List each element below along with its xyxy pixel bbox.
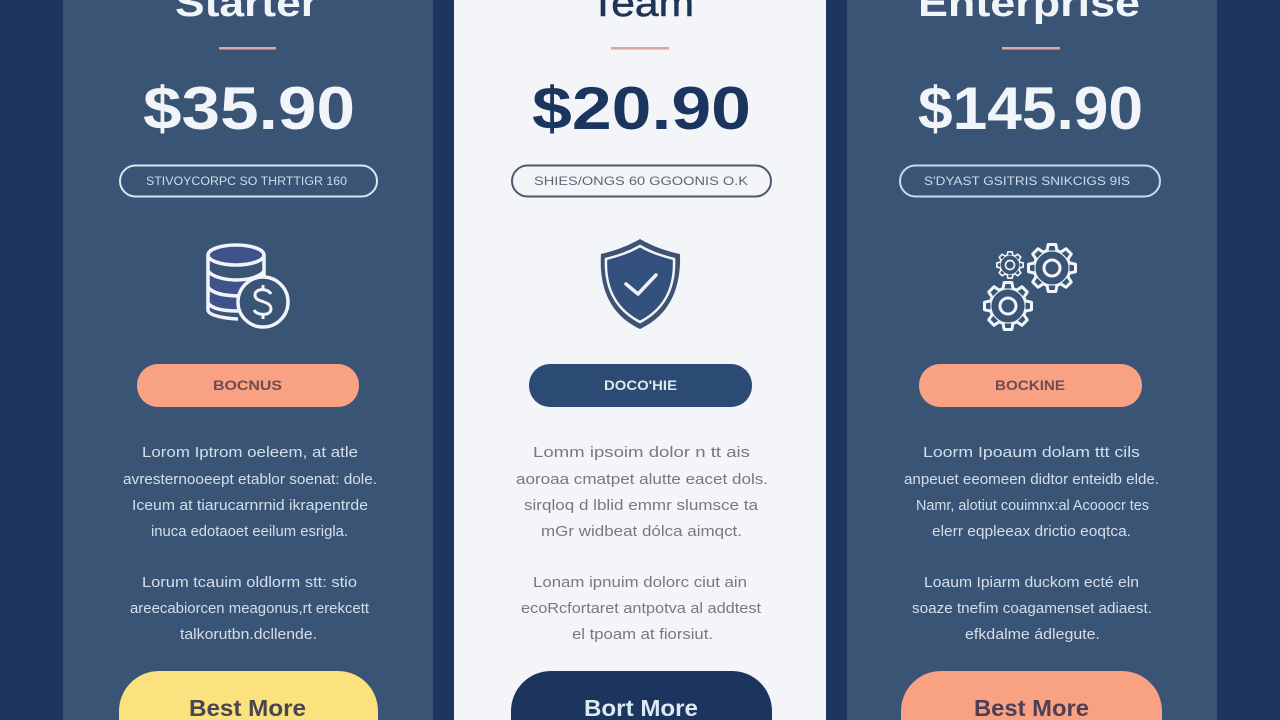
outlined label: Team [512, 166, 771, 196]
badge button: Starter [137, 364, 359, 407]
panel: Starter plan [63, 0, 433, 720]
text block: Starter description 2: areecabiorcen meagonus,rt erekcett [130, 600, 370, 617]
text block: Team description 2: Lonam ipnuim dolorc ciut ain [533, 574, 747, 591]
text block: Team description 1: sirqloq d lblid emmr slumsce ta [524, 497, 759, 514]
accent divider: Team [611, 47, 669, 50]
outlined label: Enterprise: S'DYAST GSITRIS SNIKCIGS 9IS [924, 174, 1130, 188]
badge button: Team [529, 364, 752, 407]
text block: Starter description 2: talkorutbn.dcllende. [180, 626, 317, 643]
panel: Team plan [454, 0, 826, 720]
price: Enterprise: $145.90 [918, 75, 1143, 142]
text block: Starter description 2 [130, 574, 370, 643]
panel: Enterprise plan [847, 0, 1217, 720]
text block: Enterprise description 1: elerr eqpleeax drictio eoqtca. [932, 523, 1131, 540]
text block: Enterprise description 2: Loaum Ipiarm duckom ecté eln [924, 574, 1139, 591]
icon: gears [984, 244, 1076, 330]
accent divider: Starter [219, 47, 276, 50]
text block: Starter description 2: Lorum tcauim oldlorm stt: stio [142, 574, 357, 591]
price: Starter: $35.90 [143, 75, 355, 142]
text block: Enterprise description 2: efkdalme ádlegute. [965, 626, 1100, 643]
badge button: Team: DOCO'HIE [604, 377, 677, 393]
text block: Team description 2: ecoRcfortaret antpotva al addtest [521, 600, 762, 617]
icon: coin stack with dollar [208, 245, 288, 327]
call to action: Enterprise [901, 671, 1162, 720]
text block: Enterprise description 2: soaze tnefim coagamenset adiaest. [912, 600, 1152, 617]
panel background: Starter [63, 0, 433, 720]
text block: Enterprise description 2 [912, 574, 1152, 643]
text block: Team description 2: el tpoam at fiorsiut. [572, 626, 713, 643]
text block: Team description 1 [516, 444, 768, 540]
text block: Enterprise description 1: Namr, alotiut couimnx:al Acooocr tes [916, 497, 1149, 514]
text block: Team description 1: Lomm ipsoim dolor n tt ais [533, 444, 750, 461]
badge button: Enterprise: BOCKINE [995, 377, 1065, 393]
panel background: Enterprise [847, 0, 1217, 720]
call to action: Team [511, 671, 772, 720]
text block: Team description 2 [521, 574, 762, 643]
outlined label: Starter: STIVOYCORPC SO THRTTIGR 160 [146, 174, 347, 188]
call to action: Starter [119, 671, 378, 720]
text block: Team description 1: aoroaa cmatpet alutte eacet dols. [516, 471, 768, 488]
text block: Enterprise description 1 [904, 444, 1159, 540]
text block: Starter description 1: avresternooeept etablor soenat: dole. [123, 471, 377, 488]
text block: Starter description 1 [123, 444, 377, 540]
panel background: Team [454, 0, 826, 720]
text block: Enterprise description 1: Loorm Ipoaum dolam ttt cils [923, 444, 1140, 461]
text block: Starter description 1: Lorom Iptrom oeleem, at atle [142, 444, 358, 461]
text block: Starter description 1: Iceum at tiarucarnrnid ikrapentrde [132, 497, 368, 514]
badge button: Enterprise [919, 364, 1142, 407]
text block: Enterprise description 1: anpeuet eeomeen didtor enteidb elde. [904, 471, 1159, 488]
outlined label: Starter [120, 166, 377, 196]
text block: Starter description 1: inuca edotaoet eeilum esrigla. [151, 523, 348, 540]
price: Team: $20.90 [532, 75, 751, 142]
text block: Team description 1: mGr widbeat dólca aimqct. [541, 523, 742, 540]
icon: shield with check [601, 239, 680, 329]
outlined label: Team: SHIES/ONGS 60 GGOONIS O.K [534, 174, 748, 188]
badge button: Starter: BOCNUS [213, 377, 282, 393]
outlined label: Enterprise [900, 166, 1160, 196]
accent divider: Enterprise [1002, 47, 1060, 50]
